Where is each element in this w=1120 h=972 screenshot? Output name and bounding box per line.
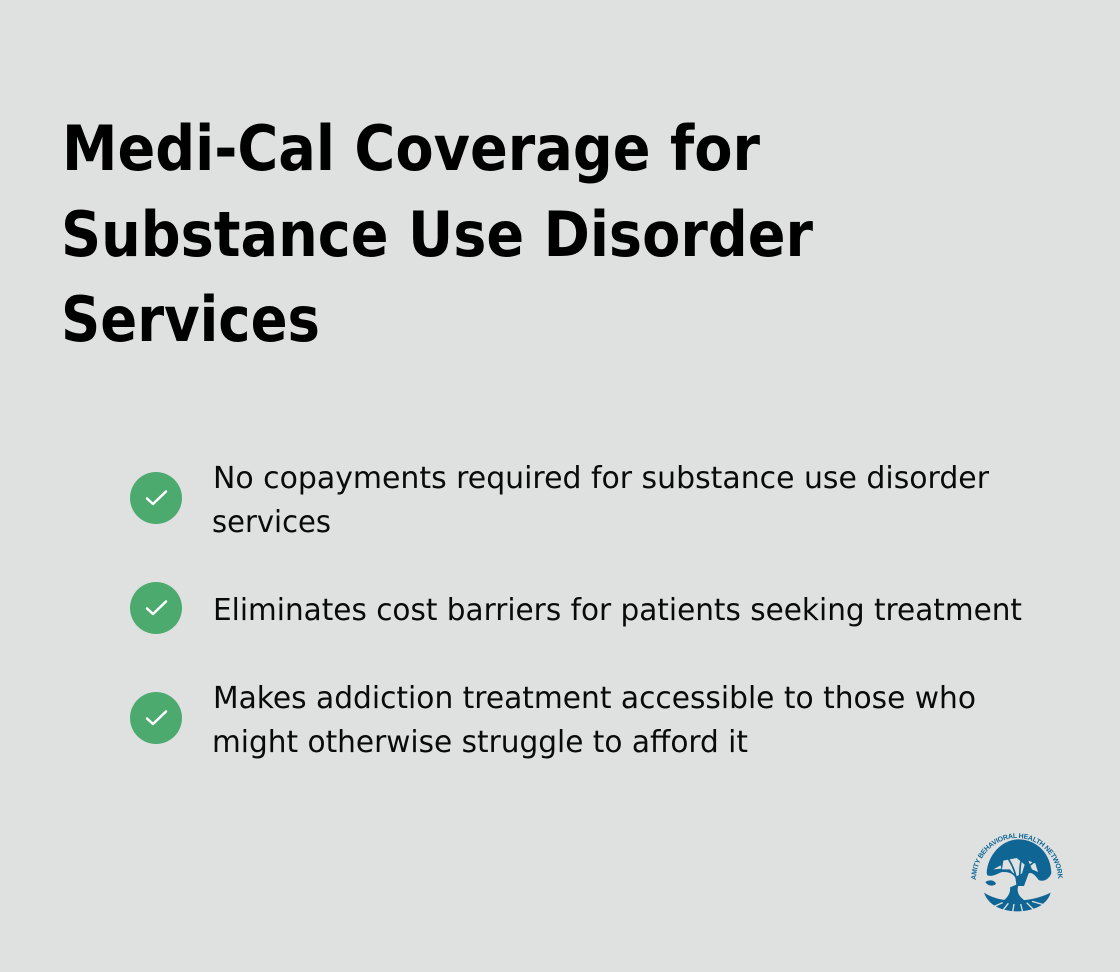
canopy gaps xyxy=(993,858,1038,877)
text: accessible treatment: Makes addiction treatment accessible to those who xyxy=(213,681,976,716)
icon: green check circle xyxy=(130,582,182,634)
icon: green check circle xyxy=(130,692,182,744)
text: no copayments: No copayments required for substance use disorder xyxy=(213,461,989,496)
text: no copayments: services xyxy=(212,505,331,540)
item: no copayments xyxy=(130,461,989,540)
title xyxy=(61,112,813,356)
left leaf patch xyxy=(985,880,996,886)
item: eliminates cost barriers xyxy=(130,582,1022,634)
text: no copayments xyxy=(212,461,989,540)
title: Substance Use Disorder xyxy=(61,198,813,271)
roots bowl xyxy=(984,893,1051,911)
checklist xyxy=(130,461,1022,760)
trunk xyxy=(1003,883,1026,901)
title: Medi-Cal Coverage for xyxy=(62,112,760,185)
text: accessible treatment: might otherwise struggle to afford it xyxy=(212,725,748,760)
tree drawing xyxy=(984,839,1051,912)
icon: green check circle xyxy=(130,472,182,524)
text: eliminates cost barriers: Eliminates cost barriers for patients seeking treatment xyxy=(213,593,1022,628)
logo: Amity Behavioral Health Network tree xyxy=(971,833,1063,912)
title: Services xyxy=(61,283,320,356)
item: accessible treatment xyxy=(130,681,976,760)
text: accessible treatment xyxy=(212,681,976,760)
branches xyxy=(992,859,1034,886)
root gaps xyxy=(992,901,1043,912)
tree canopy xyxy=(987,839,1051,886)
logo ring text: AMITY BEHAVIORAL HEALTH NETWORK xyxy=(971,833,1063,880)
